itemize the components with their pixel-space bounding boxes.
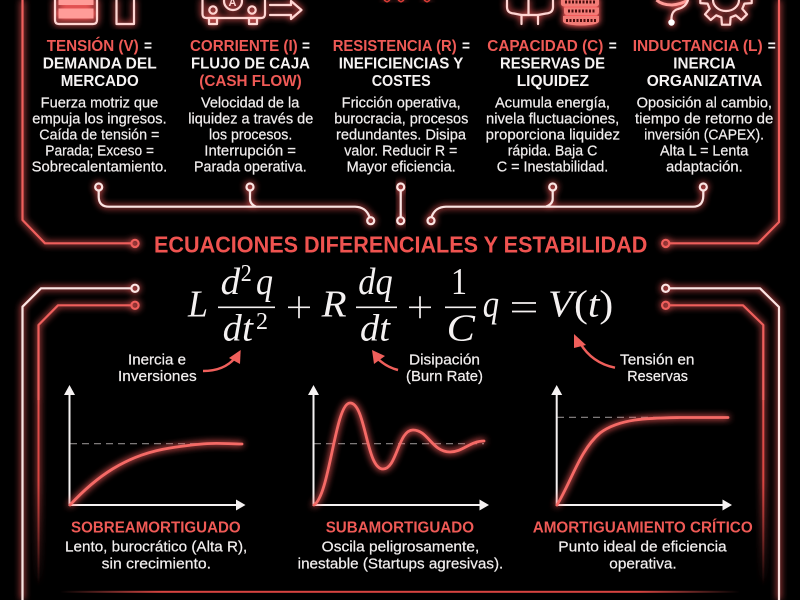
label: amortiguamiento crítico: operativa. — [609, 556, 677, 572]
heading: tensión — [43, 36, 157, 90]
body text: resistencia: valor. Reducir R = — [344, 144, 457, 160]
callout: disipación — [372, 350, 483, 385]
callout: disipación: Disipación — [409, 352, 480, 368]
label: amortiguamiento crítico: Punto ideal de eficiencia — [558, 540, 728, 556]
heading: tensión: TENSIÓN (V) — [47, 36, 139, 55]
lower frame inner left — [38, 302, 139, 585]
heading: inductancia: = — [768, 38, 776, 55]
heading: inductancia: INDUCTANCIA (L) — [633, 38, 763, 55]
connector: right bus — [428, 184, 707, 224]
body text: corriente: Parada operativa. — [194, 160, 307, 176]
body text: corriente: liquidez a través de — [188, 112, 313, 128]
heading: corriente: FLUJO DE CAJA — [191, 56, 310, 72]
differential equation: V — [548, 284, 577, 326]
icon: resistor fragment — [384, 0, 430, 2]
differential equation — [187, 261, 613, 350]
icon: ammeter with cash flow arrow — [202, 0, 302, 24]
differential equation: d — [223, 308, 243, 350]
body text: inductancia: Oposición al cambio, — [637, 96, 772, 112]
heading: corriente: CORRIENTE (I) — [190, 38, 298, 55]
differential equation: L — [187, 284, 208, 326]
body text: tensión — [32, 96, 167, 176]
lower frame outer left — [22, 285, 139, 600]
panel: capacidad — [486, 38, 620, 176]
body text: capacidad: C = Inestabilidad. — [497, 160, 608, 176]
heading: capacidad — [487, 38, 617, 90]
heading: tensión: MERCADO — [61, 73, 139, 90]
label: subamortiguado: SUBAMORTIGUADO — [326, 519, 474, 536]
label: amortiguamiento crítico — [533, 517, 753, 572]
icon: battery — [55, 0, 134, 24]
body text: resistencia — [334, 96, 468, 176]
panel: corriente — [188, 38, 313, 176]
connector: left bus — [95, 184, 374, 224]
differential equation: 2 — [241, 261, 252, 287]
body text: tensión: Parada; Exceso = — [45, 144, 154, 160]
differential equation: R — [321, 284, 347, 326]
body text: corriente — [188, 96, 313, 176]
chart: subamortiguado — [308, 385, 489, 510]
body text: capacidad: Acumula energía, — [495, 96, 610, 112]
icon: capacitor and coins — [507, 0, 599, 26]
heading: corriente — [190, 38, 310, 90]
callout: inercia e inversiones: Inercia e — [128, 352, 186, 368]
differential equation: q — [256, 261, 273, 303]
body text: corriente: los procesos. — [209, 128, 292, 144]
heading: resistencia: = — [462, 38, 470, 55]
label: sobreamortiguado: SOBREAMORTIGUADO — [71, 519, 241, 536]
body text: resistencia: Fricción operativa, — [342, 96, 461, 112]
bottom frame line — [60, 591, 740, 593]
heading: capacidad: RESERVAS DE — [500, 56, 605, 72]
callout: tensión en reservas: Tensión en — [620, 352, 694, 368]
callout: inercia e inversiones: Inversiones — [118, 369, 197, 385]
lower frame inner right — [662, 302, 763, 585]
section title: ECUACIONES DIFERENCIALES Y ESTABILIDAD — [154, 231, 647, 257]
differential equation: q — [483, 284, 499, 326]
callout: disipación: (Burn Rate) — [406, 369, 483, 385]
label: subamortiguado: Oscila peligrosamente, — [322, 540, 479, 556]
label: sobreamortiguado: Lento, burocrático (Alta R), — [65, 540, 247, 556]
body text: corriente: Interrupción = — [204, 144, 296, 160]
differential equation: t — [242, 308, 254, 350]
heading: corriente: = — [302, 38, 310, 55]
panel: tensión — [32, 36, 167, 176]
body text: capacidad: nivela fluctuaciones, — [486, 112, 619, 128]
chart: sobreamortiguado — [64, 385, 246, 510]
body text: inductancia: Alta L = Lenta — [660, 144, 749, 160]
connector: center bus — [397, 184, 404, 224]
heading: resistencia: COSTES — [372, 73, 431, 90]
heading: corriente: (CASH FLOW) — [199, 73, 302, 90]
callout: tensión en reservas: Reservas — [627, 369, 688, 385]
body text: capacidad: proporciona liquidez — [486, 128, 620, 144]
body text: resistencia: redundantes. Disipa — [336, 128, 467, 144]
heading: capacidad: = — [609, 38, 617, 55]
label: sobreamortiguado — [65, 519, 247, 572]
body text: tensión: Fuerza motriz que — [41, 96, 158, 112]
heading: resistencia — [333, 38, 470, 90]
body text: inductancia: adaptación. — [666, 160, 743, 176]
body text: resistencia: Mayor eficiencia. — [347, 160, 456, 176]
label: amortiguamiento crítico: AMORTIGUAMIENTO CRÍTICO — [533, 517, 753, 536]
body text: inductancia: tiempo de retorno de — [635, 112, 773, 128]
differential equation: dt — [360, 308, 391, 350]
heading: resistencia: INEFICIENCIAS Y — [339, 56, 464, 72]
body text: capacidad — [486, 96, 620, 176]
heading: tensión: = — [144, 38, 152, 55]
icon: inductor coil and gear — [656, 0, 752, 26]
heading: capacidad: CAPACIDAD (C) — [487, 38, 603, 55]
body text: resistencia: burocracia, procesos — [334, 112, 468, 128]
body text: tensión: Caída de tensión = — [39, 128, 159, 144]
heading: inductancia — [633, 38, 776, 90]
heading: inductancia: INERCIA — [673, 56, 736, 72]
panel: resistencia — [333, 38, 470, 176]
upper frame circuit right — [662, 0, 779, 247]
callout: tensión en reservas — [574, 334, 694, 385]
label: sobreamortiguado: sin crecimiento. — [102, 556, 211, 572]
upper frame circuit left — [22, 0, 139, 247]
body text: corriente: Velocidad de la — [201, 96, 300, 112]
body text: capacidad: rápida. Baja C — [508, 144, 597, 160]
panel: inductancia — [633, 38, 776, 176]
differential equation: dq — [358, 261, 393, 303]
heading: tensión: DEMANDA DEL — [43, 56, 157, 72]
differential equation: d — [221, 261, 241, 303]
label: subamortiguado: inestable (Startups agresivas). — [298, 556, 503, 572]
label: subamortiguado — [298, 519, 503, 572]
body text: tensión: empuja los ingresos. — [32, 112, 167, 128]
differential equation: (t) — [574, 284, 613, 326]
body text: tensión: Sobrecalentamiento. — [32, 160, 167, 176]
callout: inercia e inversiones — [118, 350, 241, 385]
lower frame outer right — [662, 285, 779, 600]
body text: inductancia: inversión (CAPEX). — [644, 128, 764, 144]
differential equation: 2 — [256, 309, 268, 335]
chart: amortiguamiento crítico — [551, 385, 732, 510]
heading: resistencia: RESISTENCIA (R) — [333, 38, 457, 55]
differential equation: C — [447, 308, 476, 350]
heading: inductancia: ORGANIZATIVA — [647, 73, 763, 90]
body text: inductancia — [635, 96, 773, 176]
differential equation: 1 — [451, 261, 467, 303]
heading: capacidad: LIQUIDEZ — [517, 73, 589, 90]
